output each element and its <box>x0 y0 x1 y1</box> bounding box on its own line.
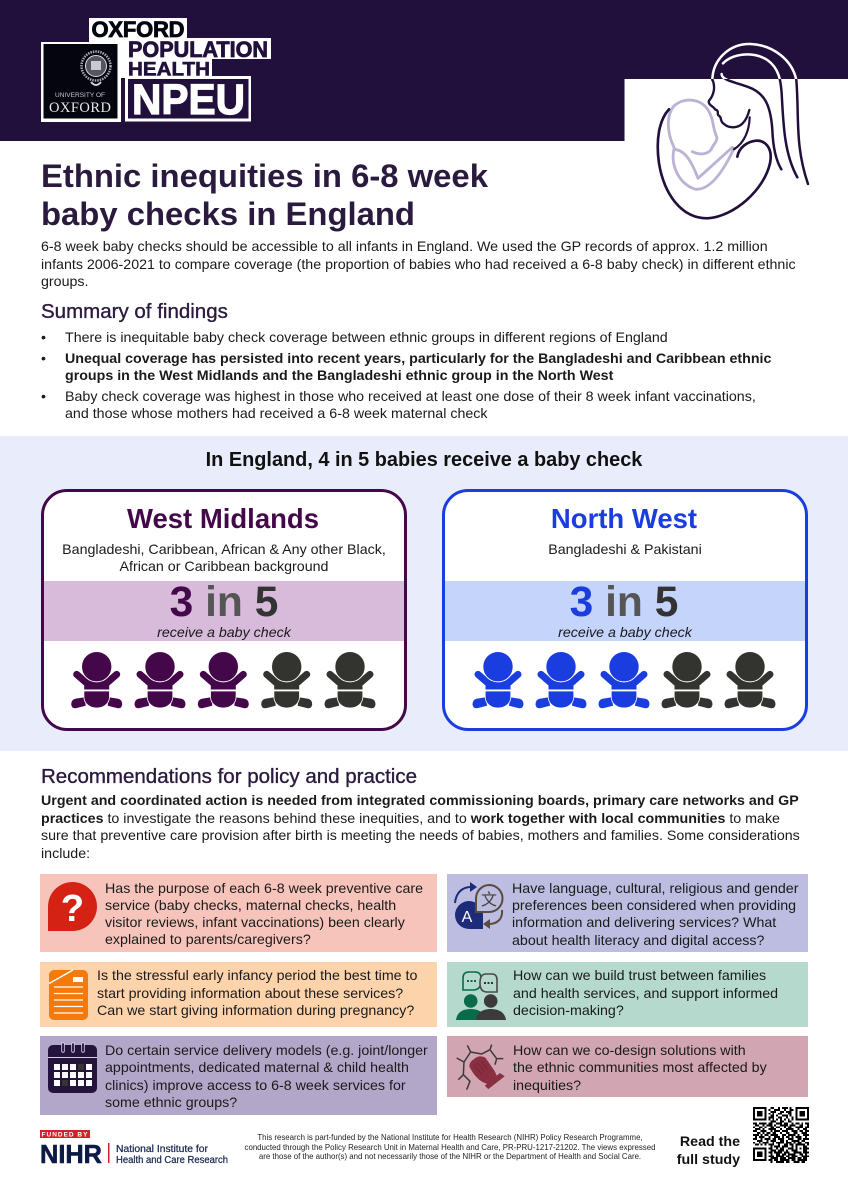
icon: question mark <box>48 882 97 931</box>
funding disclaimer: This research is part-funded by the National Institute for Health Research (NIHR) Policy Research Programme, <box>257 1133 643 1142</box>
icon: translation <box>454 882 504 929</box>
question text <box>105 1043 428 1111</box>
title <box>41 157 488 232</box>
introduction text: groups. <box>41 274 88 290</box>
box: language and culture <box>447 874 808 952</box>
box: service delivery models <box>40 1036 437 1115</box>
logo: Oxford Population Health NPEU: HEALTH <box>128 60 210 80</box>
logo: Oxford Population Health NPEU: NPEU <box>132 76 245 124</box>
ethnic groups <box>62 542 386 575</box>
recommendations introduction: include: <box>41 846 90 862</box>
question text: information and delivering services? What <box>512 915 776 931</box>
ethnic groups: Bangladeshi, Caribbean, African & Any other Black, <box>62 542 386 558</box>
ethnic groups: African or Caribbean background <box>120 559 328 575</box>
header banner <box>0 0 848 141</box>
icon: translation: A <box>462 909 473 926</box>
panel: regional coverage <box>0 436 848 751</box>
question text <box>513 1043 767 1094</box>
icon: calendar <box>48 1042 97 1093</box>
stat band <box>44 581 404 641</box>
recommendations introduction: sure that preventive care provision after birth is meeting the needs of babies, mothers and families. Some considerations <box>41 828 800 844</box>
summary bullet list: Unequal coverage has persisted into recent years, particularly for the Bangladeshi and Caribbean ethnic <box>65 351 771 367</box>
question text: decision-making? <box>513 1003 624 1019</box>
question text <box>512 881 798 949</box>
summary bullet list: • <box>41 389 46 405</box>
stat band <box>445 581 805 641</box>
stat: 3 in 5: 3 in 5 <box>570 579 678 626</box>
summary bullet list <box>41 330 771 422</box>
introduction text: infants 2006-2021 to compare coverage (the proportion of babies who had received a 6-8 baby check) in different ethnic <box>41 257 796 273</box>
logo: NIHR funder <box>40 1130 228 1169</box>
question text: How can we build trust between families <box>513 968 766 984</box>
question text: start providing information about these services? <box>97 986 403 1002</box>
question text <box>97 968 417 1019</box>
card heading: North West <box>551 503 697 534</box>
question text: some ethnic groups? <box>105 1095 237 1111</box>
question text: preferences been considered when providing <box>512 898 796 914</box>
box: timing of information <box>40 962 437 1027</box>
logo: Oxford Population Health NPEU: OXFORD <box>92 17 184 42</box>
recommendations introduction: practices to investigate the reasons behind these inequities, and to work together with local communities to make <box>41 811 780 827</box>
title: baby checks in England <box>41 195 415 232</box>
baby icons: North West, 3 of 5 <box>472 652 776 708</box>
question text: and health services, and support informed <box>513 986 778 1002</box>
panel heading: In England, 4 in 5 babies receive a baby check <box>206 449 642 471</box>
question text: Have language, cultural, religious and gender <box>512 881 798 897</box>
summary bullet list: • <box>41 330 46 346</box>
icon: hand and community network <box>456 1044 505 1090</box>
ethnic groups: Bangladeshi & Pakistani <box>548 542 702 558</box>
question text: the ethnic communities most affected by <box>513 1060 767 1076</box>
question text: Can we start giving information during pregnancy? <box>97 1003 414 1019</box>
introduction text <box>41 239 796 290</box>
question text: explained to parents/caregivers? <box>105 932 311 948</box>
recommendations introduction: Urgent and coordinated action is needed from integrated commissioning boards, primary care networks and GP <box>41 793 799 809</box>
box: purpose of services <box>40 874 437 952</box>
icon: two people talking <box>456 971 506 1020</box>
title: Ethnic inequities in 6-8 week <box>41 157 488 194</box>
logo: Oxford Population Health NPEU <box>41 17 271 124</box>
summary bullet list: and those whose mothers had received a 6-8 week maternal check <box>65 406 488 422</box>
stat caption: receive a baby check <box>157 625 291 641</box>
funding disclaimer: are those of the author(s) and not necessarily those of the NIHR or the Department of Health and Social Care. <box>259 1152 641 1161</box>
card: North West <box>442 489 808 731</box>
box: co-design <box>447 1036 808 1097</box>
logo: NIHR funder: NIHR <box>40 1139 102 1169</box>
question text: Do certain service delivery models (e.g. joint/longer <box>105 1043 428 1059</box>
question text: appointments, dedicated maternal & child health <box>105 1060 409 1076</box>
question text: How can we co-design solutions with <box>513 1043 746 1059</box>
question text <box>513 968 778 1019</box>
logo: Oxford Population Health NPEU: OXFORD <box>49 100 111 116</box>
logo: NIHR funder: Health and Care Research <box>116 1155 228 1166</box>
QR code <box>753 1107 809 1163</box>
summary bullet list: groups in the West Midlands and the Bangladeshi ethnic group in the North West <box>65 368 613 384</box>
logo: NIHR funder: FUNDED BY <box>42 1132 88 1138</box>
question text <box>105 881 423 948</box>
funding disclaimer: conducted through the Policy Research Unit in Maternal Health and Care, PR-PRU-1217-21202. The views expressed <box>245 1143 655 1152</box>
summary bullet list: There is inequitable baby check coverage between ethnic groups in different regions of England <box>65 330 668 346</box>
question text: service (baby checks, maternal checks, health <box>105 898 396 914</box>
heading: recommendations: Recommendations for policy and practice <box>41 765 417 788</box>
heading: summary of findings: Summary of findings <box>41 300 228 323</box>
recommendations introduction <box>41 793 800 862</box>
question text: visitor reviews, infant vaccinations) been clearly <box>105 915 405 931</box>
question text: Has the purpose of each 6-8 week preventive care <box>105 881 423 897</box>
stat caption: receive a baby check <box>558 625 692 641</box>
question text: Is the stressful early infancy period the best time to <box>97 968 417 984</box>
baby icons: West Midlands, 3 of 5 <box>71 652 376 708</box>
card heading: West Midlands <box>127 503 319 534</box>
summary bullet list: Baby check coverage was highest in those who received at least one dose of their 8 week infant vaccinations, <box>65 389 756 405</box>
question text: clinics) improve access to 6-8 week services for <box>105 1078 406 1094</box>
box: building trust <box>447 962 808 1027</box>
illustration: mother and baby <box>656 42 810 220</box>
logo: Oxford Population Health NPEU: POPULATION <box>128 37 268 62</box>
stat: 3 in 5: 3 in 5 <box>170 579 278 626</box>
call to action: read the study <box>677 1134 740 1168</box>
question text: inequities? <box>513 1078 581 1094</box>
introduction text: 6-8 week baby checks should be accessible to all infants in England. We used the GP records of approx. 1.2 million <box>41 239 768 255</box>
icon: document <box>48 970 88 1020</box>
funding disclaimer <box>244 1133 655 1161</box>
logo: NIHR funder: National Institute for <box>116 1144 209 1155</box>
logo: Oxford Population Health NPEU: UNIVERSITY OF <box>55 92 105 99</box>
card: West Midlands <box>41 489 407 731</box>
question text: about health literacy and digital access? <box>512 933 764 949</box>
icon: question mark: ? <box>61 888 84 930</box>
call to action: read the study: Read the <box>680 1134 740 1150</box>
summary bullet list: • <box>41 351 46 367</box>
icon: translation: 文 <box>481 891 497 909</box>
call to action: read the study: full study <box>677 1152 740 1168</box>
